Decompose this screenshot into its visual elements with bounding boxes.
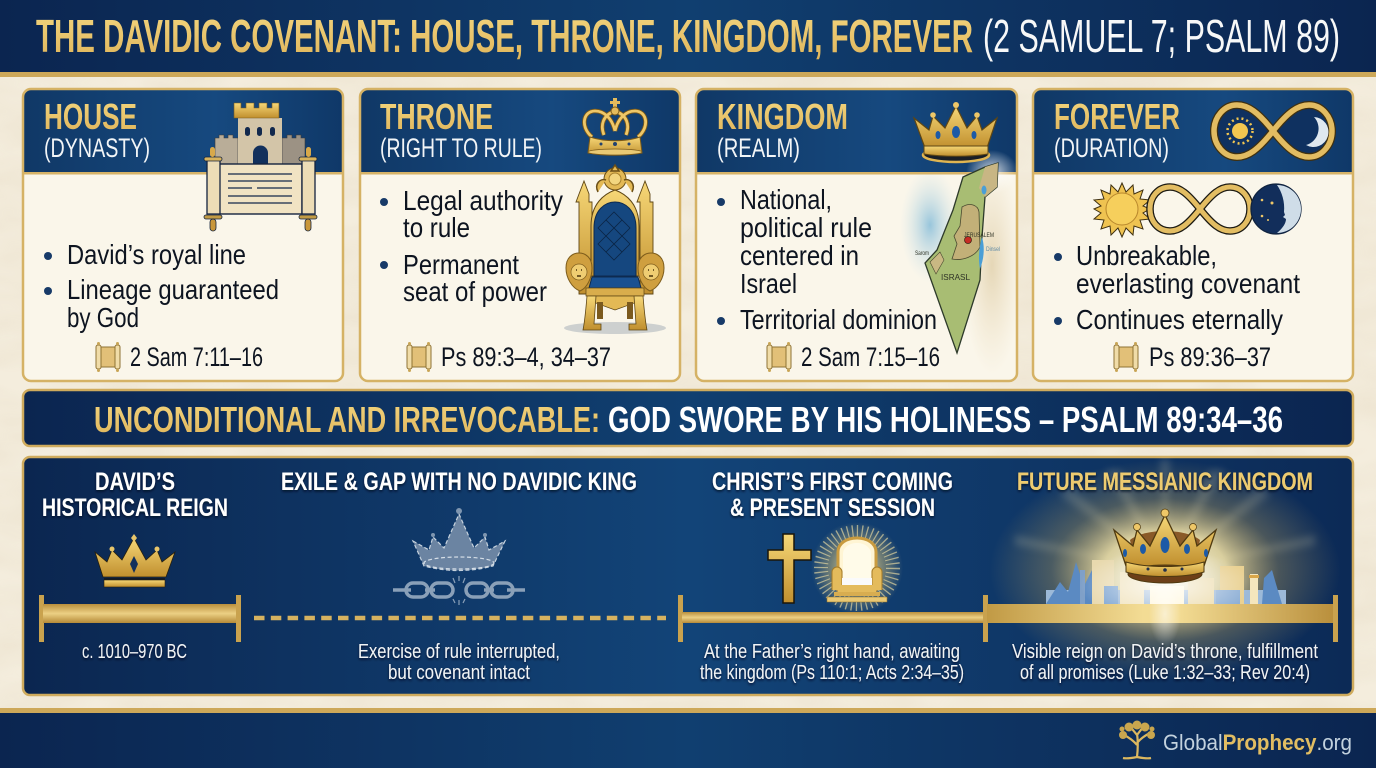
- icon: david crown: [95, 534, 175, 587]
- scripture reference: throne: Ps 89:3–4, 34–37: [441, 342, 611, 372]
- timeline bar: david: [39, 595, 241, 642]
- scripture reference: forever: [1114, 342, 1271, 372]
- bullet list: house: David’s royal line: [67, 239, 246, 270]
- bullet list: throne: seat of power: [403, 276, 547, 307]
- caption: exile: but covenant intact: [388, 661, 530, 684]
- future glow: [990, 459, 1340, 680]
- panel: house: [23, 89, 343, 381]
- bullet list: kingdom: political rule: [740, 212, 872, 243]
- icon: jeweled crown: [914, 102, 997, 162]
- scripture reference: forever: Ps 89:36–37: [1149, 342, 1271, 372]
- icon: faded crown: [413, 508, 505, 570]
- icon: cross: [768, 534, 811, 603]
- icon: heavenly city: [1046, 549, 1286, 621]
- bullet list: kingdom: Territorial dominion: [740, 304, 937, 335]
- bullet list: house: Lineage guaranteed: [67, 274, 279, 305]
- bullet list: throne: [380, 185, 563, 307]
- scripture reference: kingdom: 2 Sam 7:15–16: [801, 342, 940, 372]
- timeline heading: christ: [712, 468, 953, 522]
- icon: header infinity with sun and moon: [1214, 105, 1332, 157]
- logo text: GlobalProphecy.org: [1163, 730, 1352, 755]
- icon: castle and scroll: [204, 103, 317, 231]
- caption: exile: [358, 640, 560, 684]
- bullet list: kingdom: centered in: [740, 240, 859, 271]
- scripture reference: throne: [407, 342, 611, 372]
- bullet list: throne: Legal authority: [403, 185, 563, 216]
- panel: forever: [1033, 89, 1353, 381]
- caption: david: c. 1010–970 BC: [82, 640, 187, 663]
- icon: map of israel: [915, 163, 1000, 353]
- map background washes: [900, 155, 1022, 375]
- bullet list: throne: to rule: [403, 212, 470, 243]
- timeline heading: david: DAVID’S: [95, 468, 175, 496]
- bullet list: kingdom: National,: [740, 184, 832, 215]
- panel: kingdom: [696, 89, 1022, 381]
- heading: throne: THRONE: [380, 96, 493, 137]
- bullet list: forever: [1054, 240, 1300, 335]
- bullet list: house: by God: [67, 302, 139, 333]
- timeline bar: future: [987, 582, 1338, 646]
- timeline heading: exile: EXILE & GAP WITH NO DAVIDIC KING: [281, 468, 637, 496]
- timeline heading: david: [42, 468, 228, 522]
- icon: map of israel: ISRASL: [941, 273, 971, 282]
- timeline heading: david: HISTORICAL REIGN: [42, 494, 228, 522]
- scripture reference: house: [96, 342, 263, 372]
- caption: christ: At the Father’s right hand, awaiting: [704, 640, 960, 663]
- icon: map of israel: Dinsel: [986, 247, 1000, 253]
- scripture reference: kingdom: [767, 342, 940, 372]
- timeline heading: christ: CHRIST’S FIRST COMING: [712, 468, 953, 496]
- title banner: [0, 0, 1376, 77]
- icon: map of israel: Sarom: [915, 251, 929, 257]
- icon: royal crown: [584, 98, 646, 155]
- bullet list: forever: Unbreakable,: [1076, 240, 1217, 271]
- banner text: gold part: UNCONDITIONAL AND IRREVOCABLE:: [94, 399, 600, 440]
- icon: tree logo: [1119, 720, 1155, 758]
- footer band: [0, 708, 1376, 768]
- bullet list: forever: Continues eternally: [1076, 304, 1283, 335]
- subheading: duration: (DURATION): [1054, 133, 1169, 163]
- scripture reference: house: 2 Sam 7:11–16: [130, 342, 263, 372]
- panel: timeline: [23, 457, 1353, 695]
- heading: house: HOUSE: [44, 96, 137, 137]
- caption: exile: Exercise of rule interrupted,: [358, 640, 560, 663]
- caption: future: Visible reign on David’s throne, fulfillment: [1012, 640, 1318, 663]
- caption: christ: [700, 640, 964, 684]
- heading: kingdom: KINGDOM: [717, 96, 848, 137]
- bullet list: forever: everlasting covenant: [1076, 268, 1300, 299]
- timeline bar: christ: [678, 595, 988, 642]
- icon: throne with lions: [564, 165, 666, 334]
- bullet list: kingdom: [717, 184, 937, 335]
- bullet list: throne: Permanent: [403, 249, 519, 280]
- bullet list: kingdom: Israel: [740, 268, 797, 299]
- icon: glowing throne: [811, 522, 903, 614]
- subheading: realm: (REALM): [717, 133, 800, 163]
- subheading: right to rule: (RIGHT TO RULE): [380, 133, 542, 163]
- panel: throne: [360, 89, 680, 381]
- subheading: dynasty: (DYNASTY): [44, 133, 150, 163]
- banner: unconditional and irrevocable: [23, 390, 1353, 446]
- icon: sun, infinity, moon: [1094, 183, 1301, 237]
- heading: forever: FOREVER: [1054, 96, 1180, 137]
- caption: future: [1012, 640, 1318, 684]
- icon: map of israel: JERUSALEM: [964, 233, 994, 239]
- timeline heading: christ: & PRESENT SESSION: [730, 494, 935, 522]
- icon: messianic crown: [1114, 509, 1216, 583]
- timeline dashed gap: [254, 616, 666, 620]
- caption: christ: the kingdom (Ps 110:1; Acts 2:34–35): [700, 661, 964, 684]
- bullet list: house: [44, 239, 279, 333]
- icon: broken chain: [393, 576, 525, 605]
